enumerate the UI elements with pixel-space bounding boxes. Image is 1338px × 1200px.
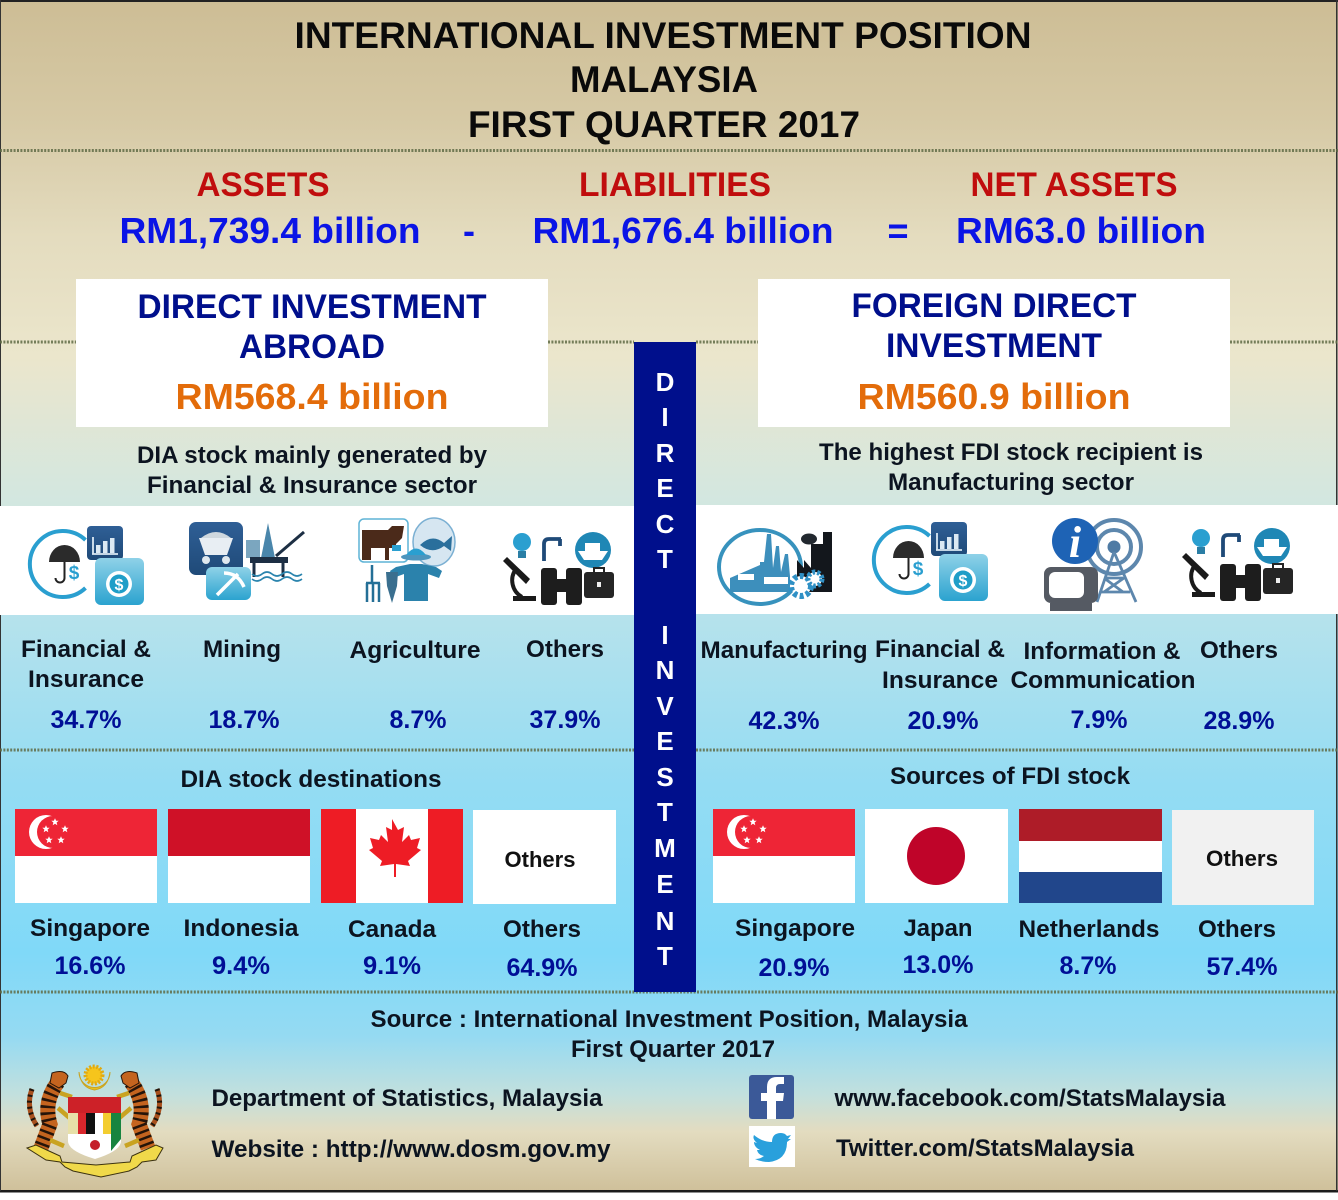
text: FDI stock note: The highest FDI stock recipient is [819,439,1203,466]
destination: Indonesia: Indonesia [184,915,299,942]
destination: Indonesia [184,915,299,980]
assets: ASSETS [196,166,330,204]
source: Netherlands: 8.7% [1060,952,1116,980]
vertical banner: direct investment: T [657,544,673,574]
sector: information and communication: 7.9% [1070,706,1128,734]
sector: others: 37.9% [530,706,600,734]
source: Singapore: 20.9% [758,954,830,982]
DIA destination flags [15,809,616,904]
DIA destination labels [30,915,581,982]
sector: others: Others [1200,637,1278,664]
FDI source labels [735,915,1278,982]
flag: Netherlands [1019,809,1162,903]
sector: manufacturing: Manufacturing [700,637,868,664]
icon: facebook [749,1075,794,1119]
contact: department and website: Website : http://www.dosm.gov.my [212,1136,611,1163]
sector: others: 28.9% [1204,707,1274,735]
sector: financial and insurance: 34.7% [50,706,122,734]
source: Netherlands [1018,916,1160,980]
vertical banner: direct investment [634,342,696,992]
icon band white strips [0,505,1338,615]
icon: Malaysia coat of arms [27,1066,163,1177]
flag: Singapore [15,809,157,903]
source: others [1198,916,1278,981]
sector: financial and insurance: Insurance [28,666,144,693]
net assets [956,166,1206,251]
sector: financial and insurance: Financial & [875,636,1005,663]
vertical banner: direct investment: S [656,762,674,792]
source: Japan [902,915,974,979]
destination: others: 64.9% [506,954,578,982]
text: DIA stock note [137,442,488,499]
vertical banner: direct investment: R [656,438,675,468]
sector: others [526,636,604,734]
assets: RM1,739.4 billion [120,210,420,251]
icon: manufacturing [719,530,832,604]
source: Japan: Japan [904,915,972,942]
panel: direct investment abroad header [76,279,548,427]
vertical banner: direct investment: E [656,473,674,503]
panel: foreign direct investment header: INVESTMENT [886,327,1102,365]
flag: Indonesia [168,809,310,903]
flag placeholder: others [1172,810,1314,905]
sector: financial and insurance: 20.9% [908,707,978,735]
liabilities [532,166,834,251]
sector: financial and insurance [875,636,1005,735]
icon: information and communication: i [1069,518,1082,567]
contact: social media links: Twitter.com/StatsMalaysia [836,1135,1135,1162]
liabilities: RM1,676.4 billion [532,210,834,251]
sector: mining: 18.7% [208,706,280,734]
source note: Source : International Investment Position, Malaysia [370,1006,968,1033]
vertical banner: direct investment: C [656,509,675,539]
equals sign: = [887,210,909,251]
flag placeholder: others [473,810,616,904]
destination: others [503,916,581,982]
panel: foreign direct investment header: FOREIGN DIRECT [852,287,1137,325]
destination: Singapore [30,915,150,980]
source: Singapore: Singapore [735,915,855,942]
title: MALAYSIA [570,59,758,100]
destination: Canada: 9.1% [363,952,421,980]
sector: others [1200,637,1278,735]
minus sign: - [463,210,475,251]
flag placeholder: others: Others [1206,846,1278,871]
sector: financial and insurance: Insurance [882,667,998,694]
contact: department and website [212,1085,611,1163]
sector: manufacturing [700,637,868,735]
flag: Canada [321,809,463,903]
text: DIA stock note: DIA stock mainly generated by [137,442,488,469]
FDI source flags [713,809,1314,905]
destination: others: Others [503,916,581,943]
vertical banner: direct investment: V [656,691,674,721]
icon: others (FDI) [1182,528,1293,601]
sector: mining [203,636,281,734]
sector: information and communication: Communication [1010,667,1196,694]
title: INTERNATIONAL INVESTMENT POSITION [294,15,1032,56]
sector: financial and insurance: Financial & [21,636,151,663]
text: DIA stock note: Financial & Insurance sector [147,472,477,499]
summary equation: assets minus liabilities equals net assets [120,166,1206,251]
net assets: RM63.0 billion [956,210,1206,251]
title: FIRST QUARTER 2017 [468,104,860,145]
sector: information and communication: Information & [1024,638,1180,665]
assets [120,166,420,251]
title [294,15,1032,145]
icon: financial and insurance (DIA) [30,526,144,605]
destination: Singapore: Singapore [30,915,150,942]
contact: social media links: www.facebook.com/StatsMalaysia [833,1085,1226,1112]
destination: Canada: Canada [348,916,437,943]
sector: manufacturing: 42.3% [748,707,820,735]
destination: Canada [348,916,437,980]
icon: twitter [749,1126,795,1167]
sector: others: Others [526,636,604,663]
panel: direct investment abroad header: ABROAD [239,328,385,366]
icon: agriculture [359,518,455,603]
flag: Singapore [713,809,855,903]
FDI sector breakdown [700,636,1278,735]
vertical banner: direct investment: M [654,833,676,863]
icon: others (DIA) [503,532,614,605]
source: Netherlands: Netherlands [1018,916,1160,943]
vertical banner: direct investment: N [656,906,674,936]
net assets: NET ASSETS [970,166,1178,204]
source: Japan: 13.0% [902,951,974,979]
vertical banner: direct investment: T [657,797,673,827]
source note: First Quarter 2017 [571,1036,775,1063]
source note [370,1006,968,1063]
sector: financial and insurance [21,636,151,734]
DIA sector breakdown [21,636,604,734]
sector: agriculture: Agriculture [350,637,480,664]
text: FDI stock note: Manufacturing sector [888,469,1134,496]
sector: agriculture: 8.7% [390,706,446,734]
panel: foreign direct investment header [758,279,1230,427]
vertical banner: direct investment: E [656,869,674,899]
heading: sources of FDI stock: Sources of FDI stock [890,763,1131,790]
liabilities: LIABILITIES [579,166,771,204]
vertical banner: direct investment: E [656,726,674,756]
icon: information and communication [1044,518,1141,611]
panel: direct investment abroad header: DIRECT INVESTMENT [138,288,487,326]
destination: Indonesia: 9.4% [212,952,270,980]
source: others: 57.4% [1206,953,1278,981]
contact: department and website: Department of Statistics, Malaysia [212,1085,603,1112]
destination: Singapore: 16.6% [54,952,126,980]
vertical banner: direct investment: D [656,367,674,397]
vertical banner: direct investment: T [657,941,673,971]
panel: direct investment abroad header: RM568.4 billion [176,376,448,417]
vertical banner: direct investment: I [661,402,669,432]
flag placeholder: others: Others [504,847,576,872]
heading: DIA stock destinations: DIA stock destinations [180,766,442,793]
contact: social media links [833,1085,1226,1162]
sector: information and communication [1010,638,1196,734]
icon: mining [189,522,304,600]
source: Singapore [735,915,855,982]
vertical banner: direct investment: I [661,620,669,650]
sector: agriculture [350,637,480,734]
icon: financial and insurance (FDI) [874,522,988,601]
sector: mining: Mining [203,636,281,663]
panel: foreign direct investment header: RM560.9 billion [858,376,1130,417]
flag: Japan [865,809,1008,903]
source: others: Others [1198,916,1276,943]
text: FDI stock note [819,439,1203,496]
vertical banner: direct investment: N [656,655,674,685]
